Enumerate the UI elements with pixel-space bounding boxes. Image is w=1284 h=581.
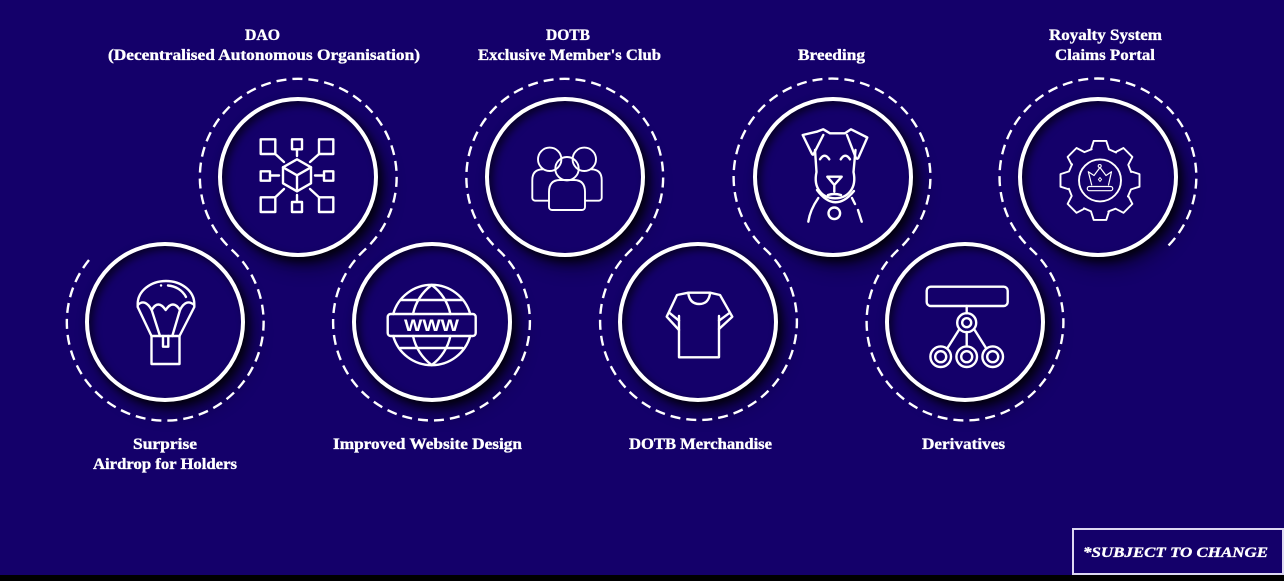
label: DAO: (Decentralised Autonomous Organisation) [108, 47, 420, 64]
panel: improved website design circle [352, 242, 512, 402]
panel: breeding circle [753, 97, 913, 257]
panel: DAO circle [218, 97, 378, 257]
callout: subject to change: *SUBJECT TO CHANGE [1083, 545, 1268, 561]
icon: parachute airdrop [138, 281, 194, 364]
icon: derivatives tree [927, 287, 1008, 367]
panel: DOTB exclusive club circle [485, 97, 645, 257]
icon: www globe [388, 285, 476, 365]
label: improved website design: Improved Website Design [333, 436, 522, 453]
label: DAO [108, 27, 420, 64]
label: royalty system claims portal: Royalty System [1049, 27, 1162, 44]
label: DAO: DAO [245, 27, 280, 44]
icon: gear with crown [1060, 141, 1140, 220]
label: surprise airdrop [93, 436, 237, 473]
label: royalty system claims portal: Claims Portal [1055, 47, 1156, 64]
callout: subject to change [1072, 528, 1284, 575]
panel: derivatives circle [885, 242, 1045, 402]
panel: DOTB merchandise circle [618, 242, 778, 402]
label: DOTB exclusive member's club [478, 27, 661, 64]
label: derivatives: Derivatives [922, 436, 1005, 453]
label: surprise airdrop: Surprise [133, 436, 197, 453]
label: surprise airdrop: Airdrop for Holders [93, 456, 237, 473]
icon: t-shirt [667, 293, 732, 357]
icon: www globe: WWW [404, 316, 460, 335]
dashed wave connector [67, 79, 1196, 421]
label: breeding: Breeding [798, 47, 865, 64]
label: DOTB merchandise: DOTB Merchandise [629, 436, 772, 453]
panel: royalty system circle [1018, 97, 1178, 257]
bottom black strip [0, 575, 1284, 581]
label: DOTB exclusive member's club: Exclusive Member's Club [478, 47, 661, 64]
label: DOTB exclusive member's club: DOTB [546, 27, 590, 44]
panel: surprise airdrop circle [85, 242, 245, 402]
icon: DAO network cube [261, 139, 333, 212]
label: royalty system claims portal [1049, 27, 1162, 64]
icon: group of members [532, 148, 602, 210]
icon: dog head [803, 129, 867, 222]
